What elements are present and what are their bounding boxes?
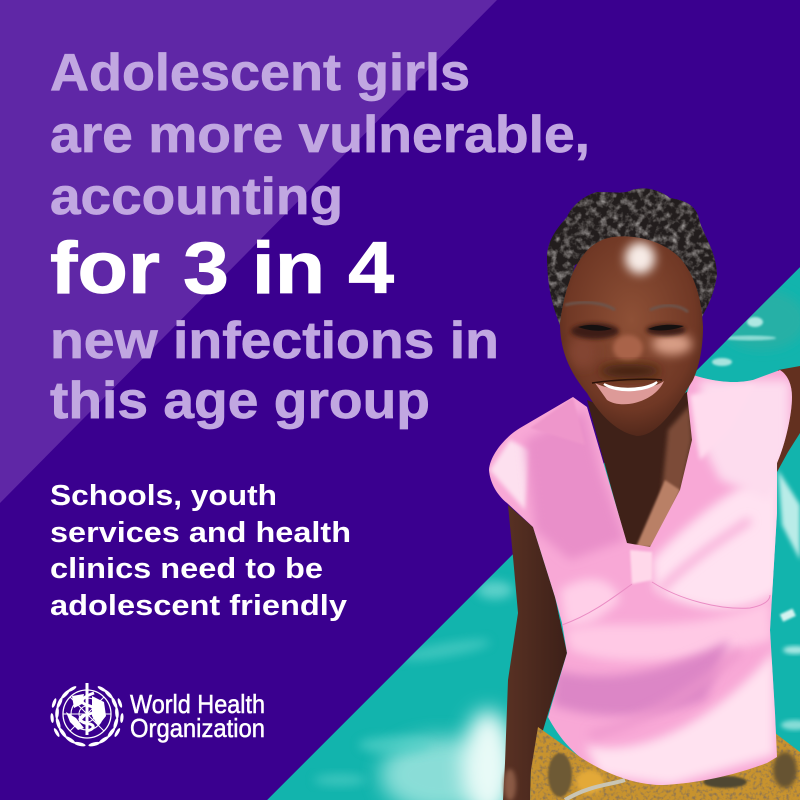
skirt <box>530 727 800 800</box>
supporting message: clinics need to be <box>50 553 323 585</box>
left arm <box>503 505 567 800</box>
headline line 5: new infections in <box>50 312 499 370</box>
headline emphasis: for 3 in 4 <box>50 228 394 309</box>
headline <box>50 44 590 430</box>
icon: WHO emblem <box>50 683 124 747</box>
sunlit chest <box>655 405 692 547</box>
photo: smiling girl <box>485 180 800 800</box>
WHO logo <box>50 683 265 747</box>
headline line 1: Adolescent girls <box>50 44 470 102</box>
supporting message: adolescent friendly <box>50 590 347 622</box>
headline line 3: accounting <box>50 168 343 226</box>
arm highlight <box>504 769 516 800</box>
organization name: World Health <box>130 689 265 719</box>
supporting message <box>50 480 351 622</box>
facial features <box>565 242 692 404</box>
face <box>560 236 703 436</box>
light purple diagonal panel <box>0 0 497 503</box>
pink shirt <box>485 365 800 790</box>
shirt seams <box>562 582 770 625</box>
organization name line 2: Organization <box>130 713 265 743</box>
headline line 6: this age group <box>50 372 430 430</box>
teal water panel <box>267 267 800 800</box>
supporting message: services and health <box>50 517 351 549</box>
supporting message: Schools, youth <box>50 480 277 512</box>
right arm <box>777 366 800 472</box>
hair <box>547 188 717 325</box>
laurel wreath <box>50 685 124 747</box>
neck and chest <box>587 390 693 548</box>
headline line 2: are more vulnerable, <box>50 106 590 164</box>
